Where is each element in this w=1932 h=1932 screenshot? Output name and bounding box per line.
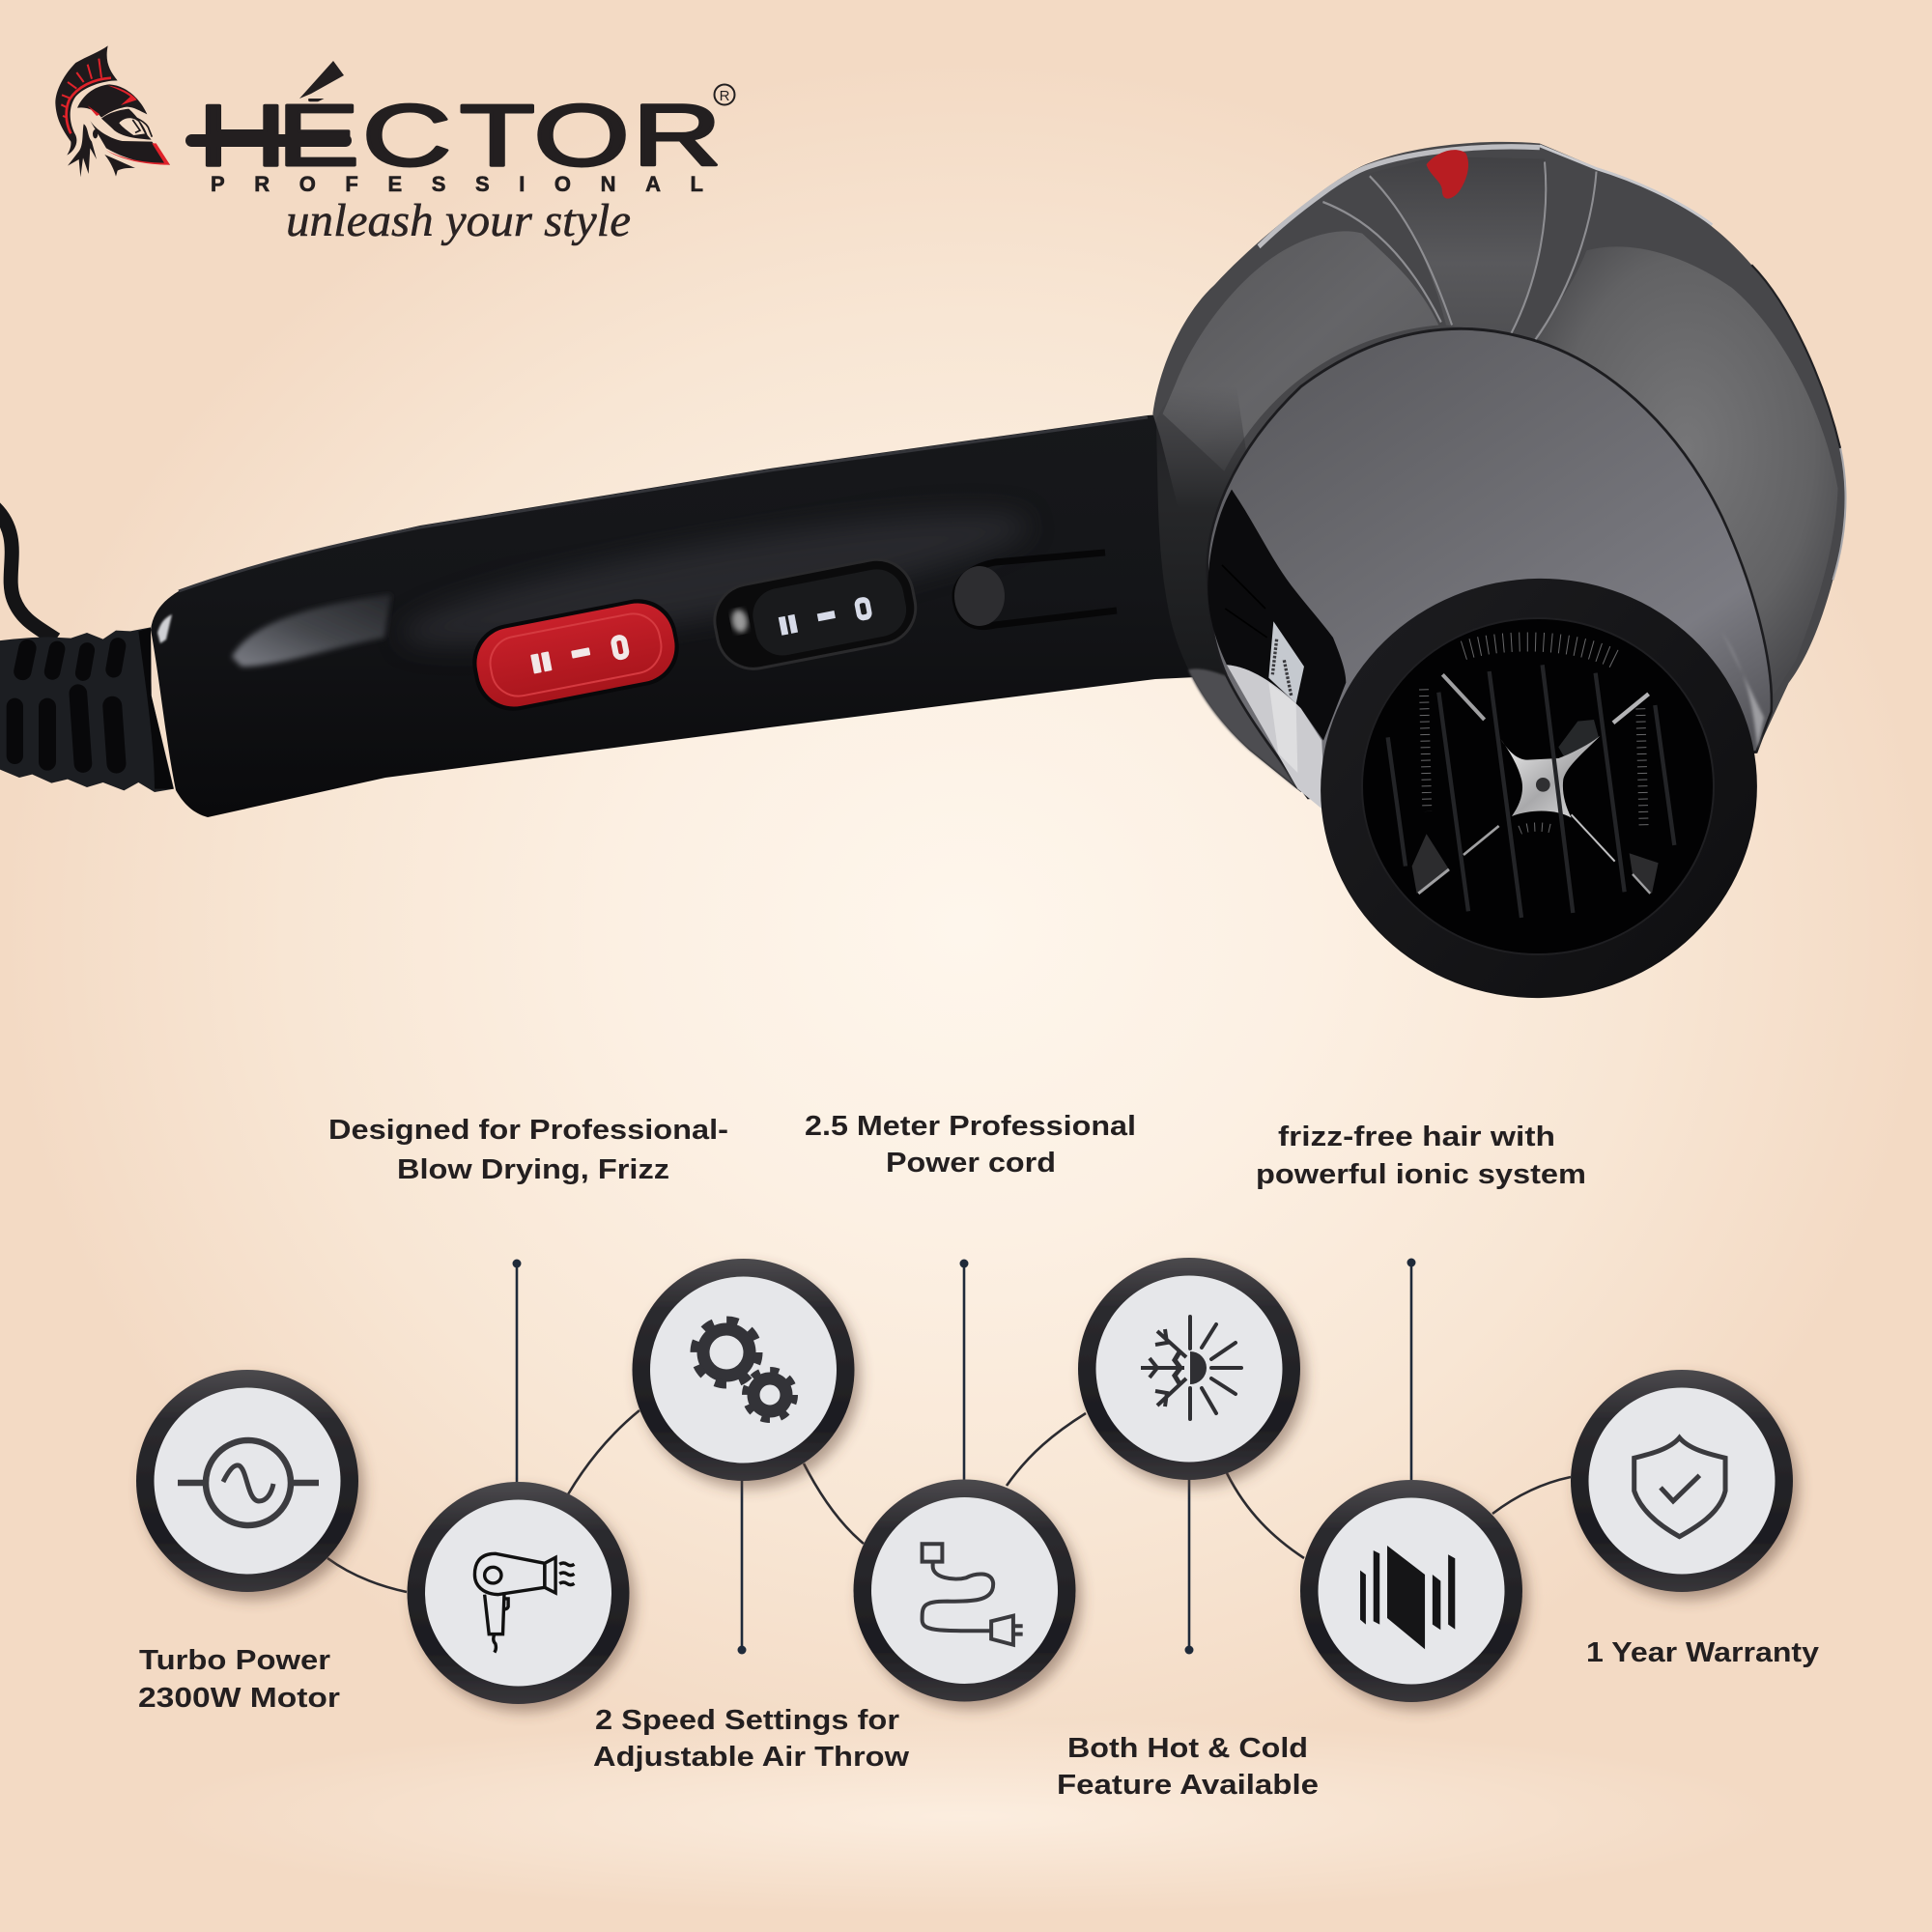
connector lines bbox=[327, 1410, 1571, 1592]
slider switch bbox=[954, 553, 1117, 627]
label: ionic system: powerful ionic system bbox=[1256, 1159, 1586, 1190]
central cross bbox=[1500, 736, 1601, 818]
registered mark: R bbox=[720, 88, 730, 104]
feature badge: warranty bbox=[1571, 1370, 1793, 1592]
feature badge: motor bbox=[136, 1370, 358, 1592]
feature badge: power cord bbox=[854, 1480, 1076, 1702]
label: ionic system: frizz-free hair with bbox=[1278, 1122, 1555, 1152]
icon: gears bbox=[695, 1321, 794, 1419]
label: speed settings: 2 Speed Settings for bbox=[595, 1705, 899, 1736]
icon: ion plates bbox=[1360, 1546, 1455, 1649]
label: hot and cold: Both Hot & Cold bbox=[1067, 1733, 1308, 1764]
wordmark: HÉCTOR bbox=[197, 87, 722, 185]
grille bars bbox=[1388, 665, 1674, 918]
icon: snowflake and sun bbox=[1141, 1317, 1241, 1419]
label: ionic system bbox=[1256, 1122, 1586, 1190]
cone reflections and label bbox=[1208, 490, 1346, 811]
nozzle interior bbox=[1388, 641, 1674, 918]
icon: AC sine wave bbox=[178, 1440, 319, 1525]
tagline: unleash your style bbox=[286, 195, 631, 246]
left matte panel bbox=[1163, 231, 1438, 471]
heating coil springs bbox=[1424, 641, 1644, 830]
label: turbo power: 2300W Motor bbox=[138, 1683, 340, 1714]
label: turbo power bbox=[138, 1645, 340, 1714]
label: power cord length: 2.5 Meter Professional bbox=[805, 1111, 1136, 1142]
glossy handle end bbox=[232, 594, 391, 667]
icon: cord and plug bbox=[923, 1544, 1023, 1645]
registered mark bbox=[715, 85, 734, 104]
label: power cord length: Power cord bbox=[886, 1148, 1056, 1179]
top centre panel bbox=[1370, 157, 1546, 333]
feature badge: dryer bbox=[408, 1482, 630, 1704]
label: turbo power: Turbo Power bbox=[139, 1645, 330, 1676]
front cone bbox=[1208, 328, 1772, 798]
cross arms bbox=[1442, 674, 1485, 720]
label: professional blow drying bbox=[328, 1115, 728, 1185]
nozzle opening bbox=[1362, 618, 1714, 954]
label: power cord length bbox=[805, 1111, 1136, 1179]
label: hot and cold bbox=[1057, 1733, 1319, 1801]
cord strain relief bbox=[0, 627, 174, 792]
label: speed settings: Adjustable Air Throw bbox=[593, 1742, 909, 1773]
power cord bbox=[0, 507, 56, 639]
feature badge: ionic system bbox=[1300, 1480, 1522, 1702]
button: black speed switch bbox=[708, 554, 922, 675]
label: speed settings bbox=[593, 1705, 909, 1773]
dryer head body bbox=[1152, 142, 1846, 798]
nozzle bbox=[1300, 557, 1777, 1019]
leader lines bbox=[512, 1258, 1416, 1654]
icon: hair dryer bbox=[474, 1553, 574, 1653]
label: warranty: 1 Year Warranty bbox=[1586, 1637, 1819, 1668]
hair dryer bbox=[0, 142, 1846, 1019]
feature badge: speed settings bbox=[632, 1259, 854, 1481]
dryer neck bbox=[1156, 386, 1340, 792]
right matte panel bbox=[1535, 246, 1838, 695]
subtitle: PROFESSIONAL bbox=[211, 172, 703, 196]
icon: spartan helmet bbox=[55, 45, 170, 177]
button: red heat switch bbox=[466, 592, 686, 718]
indicator: red drop bbox=[1427, 150, 1468, 199]
label: professional blow drying: Blow Drying, Frizz bbox=[397, 1154, 669, 1185]
icon: shield check bbox=[1634, 1437, 1725, 1537]
wordmark bbox=[185, 61, 719, 168]
product sticker bbox=[1268, 621, 1304, 703]
logo: Héctor Professional bbox=[55, 45, 735, 246]
feature badge: hot and cold bbox=[1078, 1258, 1300, 1480]
label: hot and cold: Feature Available bbox=[1057, 1770, 1319, 1801]
label: professional blow drying: Designed for Professional- bbox=[328, 1115, 728, 1146]
handle bbox=[151, 411, 1217, 817]
